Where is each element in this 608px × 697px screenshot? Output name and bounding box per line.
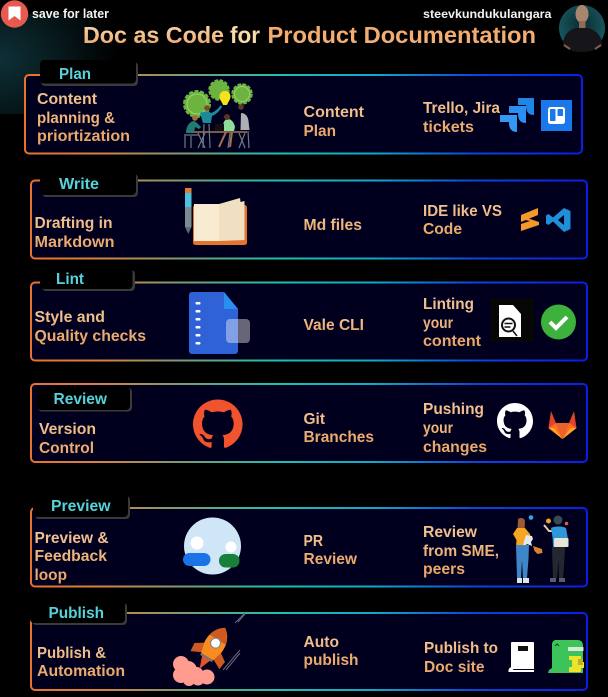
icon: green dinosaur — [548, 640, 584, 673]
icon: Sublime Text — [521, 208, 539, 231]
icon: Trello — [541, 100, 572, 131]
output text: publish — [304, 652, 358, 669]
icon: GitHub orange — [193, 400, 243, 448]
tab: Lint: Lint — [56, 271, 85, 288]
tools text: content — [423, 333, 482, 350]
activity text: Style and — [34, 309, 105, 326]
output text: Auto — [304, 634, 339, 651]
activity text: priortization — [37, 128, 130, 145]
activity text: Feedback — [34, 548, 107, 565]
title: Product Documentation — [268, 22, 536, 48]
panel: Lint — [31, 268, 587, 360]
panel: Plan — [25, 60, 582, 154]
activity text: Drafting in — [34, 215, 112, 232]
tab: Write: Write — [59, 176, 99, 193]
panel: Preview — [31, 494, 587, 586]
title — [83, 22, 536, 48]
header: save for later — [1, 0, 109, 28]
activity text: loop — [34, 567, 67, 584]
output text: Vale CLI — [304, 317, 364, 334]
icon: rocket — [173, 613, 245, 686]
icon: VS Code — [546, 208, 570, 232]
tools text: Code — [423, 221, 462, 238]
tab: Publish: Publish — [48, 605, 104, 622]
author avatar — [559, 5, 605, 52]
icon: GitHub white — [497, 403, 533, 438]
tab: Preview: Preview — [51, 498, 111, 515]
icon: green check — [541, 304, 576, 340]
activity text: Content — [37, 91, 98, 108]
panel: Write — [31, 172, 587, 258]
tools text: Pushing — [423, 401, 484, 418]
tools text: tickets — [423, 119, 474, 136]
tab: Lint — [40, 268, 135, 291]
activity text: Version — [39, 421, 96, 438]
tools text: your — [423, 420, 453, 437]
output text: PR — [304, 533, 323, 550]
tab: Review: Review — [54, 391, 108, 408]
icon: reviewers illustration — [513, 515, 568, 583]
output text: Review — [304, 551, 358, 568]
icon: GitLab — [548, 411, 576, 439]
tab: Preview — [33, 494, 130, 519]
tab: Plan: Plan — [59, 66, 91, 83]
icon: notebook and pen — [185, 188, 247, 245]
tools text: Linting — [423, 296, 474, 313]
tools text: Trello, Jira — [423, 100, 500, 117]
tab: Write — [40, 172, 138, 197]
panel: Review — [31, 384, 587, 462]
activity text: Markdown — [34, 234, 114, 251]
icon: preview people circle — [183, 518, 241, 574]
activity text: Control — [39, 440, 94, 457]
icon: red bookmark badge — [1, 0, 28, 28]
icon: white book — [508, 642, 534, 672]
output text: Git — [304, 411, 326, 428]
output text: Content — [304, 104, 365, 121]
activity text: Preview & — [34, 530, 109, 547]
icon: team with gears and bulb — [184, 80, 252, 148]
output text: Branches — [304, 429, 374, 446]
tools text: your — [423, 315, 453, 332]
icon: document with overlay — [189, 292, 250, 354]
activity text: planning & — [37, 110, 115, 127]
panel: Publish — [30, 601, 587, 690]
tools text: IDE like VS — [423, 203, 502, 220]
tools text: Doc site — [424, 659, 485, 676]
tools text: changes — [423, 439, 487, 456]
output text: Plan — [304, 123, 336, 140]
tools text: Review — [423, 524, 478, 541]
title: Doc as Code — [83, 22, 224, 48]
tab: Publish — [30, 601, 127, 625]
icon: Vale — [490, 298, 534, 342]
activity text: Publish & — [37, 645, 106, 662]
activity text: Quality checks — [34, 328, 146, 345]
activity text: Automation — [37, 663, 125, 680]
tools text: from SME, — [423, 543, 499, 560]
tools text: Publish to — [424, 640, 498, 657]
save for later label: save for later — [32, 7, 109, 21]
output text: Md files — [304, 217, 362, 234]
tab: Plan — [40, 60, 138, 86]
icon: Jira — [500, 98, 534, 132]
tab: Review — [37, 387, 132, 412]
header: author name: steevkundukulangara — [423, 7, 552, 21]
title: for — [230, 22, 260, 48]
tools text: peers — [423, 561, 465, 578]
